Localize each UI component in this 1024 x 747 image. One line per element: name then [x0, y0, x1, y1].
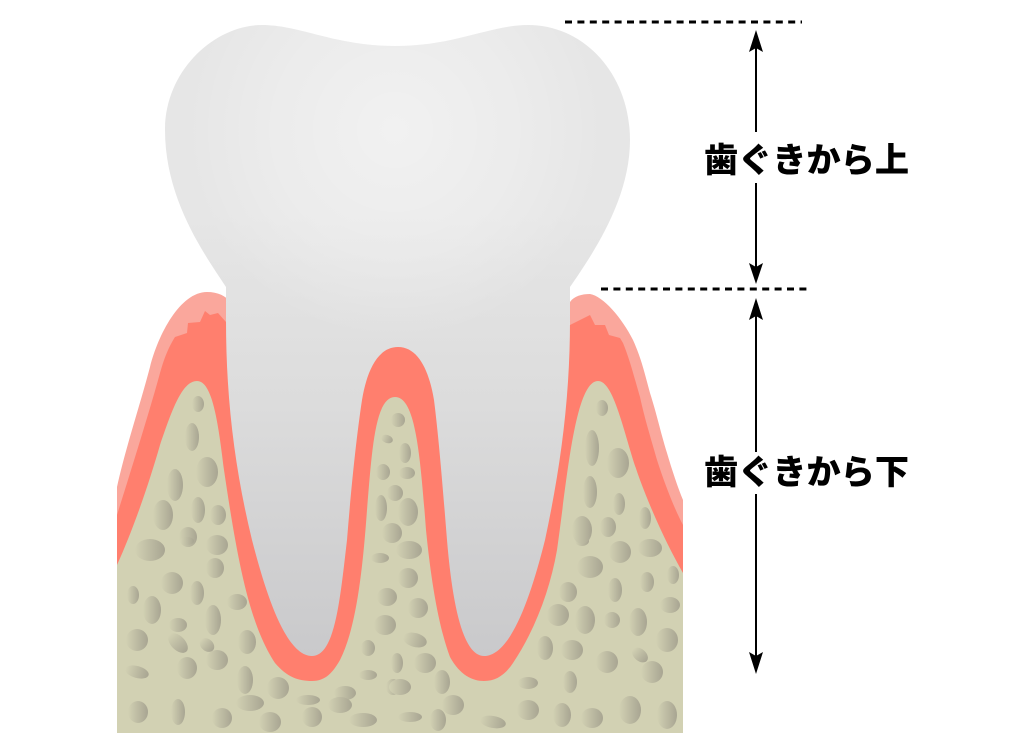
label: below the gums: 歯ぐきから下 [704, 454, 909, 492]
arrow: above the gums [749, 30, 763, 284]
tooth and gum diagram [117, 20, 908, 733]
tooth [165, 25, 630, 656]
gumline dotted guide line [601, 288, 808, 290]
upper dotted guide line [565, 20, 802, 24]
bone pores [124, 396, 680, 732]
label: above the gums: 歯ぐきから上 [704, 142, 909, 180]
pale gum margin [117, 292, 683, 570]
arrow: below the gums [749, 298, 763, 674]
alveolar bone [117, 381, 683, 733]
coral gum [117, 311, 683, 700]
